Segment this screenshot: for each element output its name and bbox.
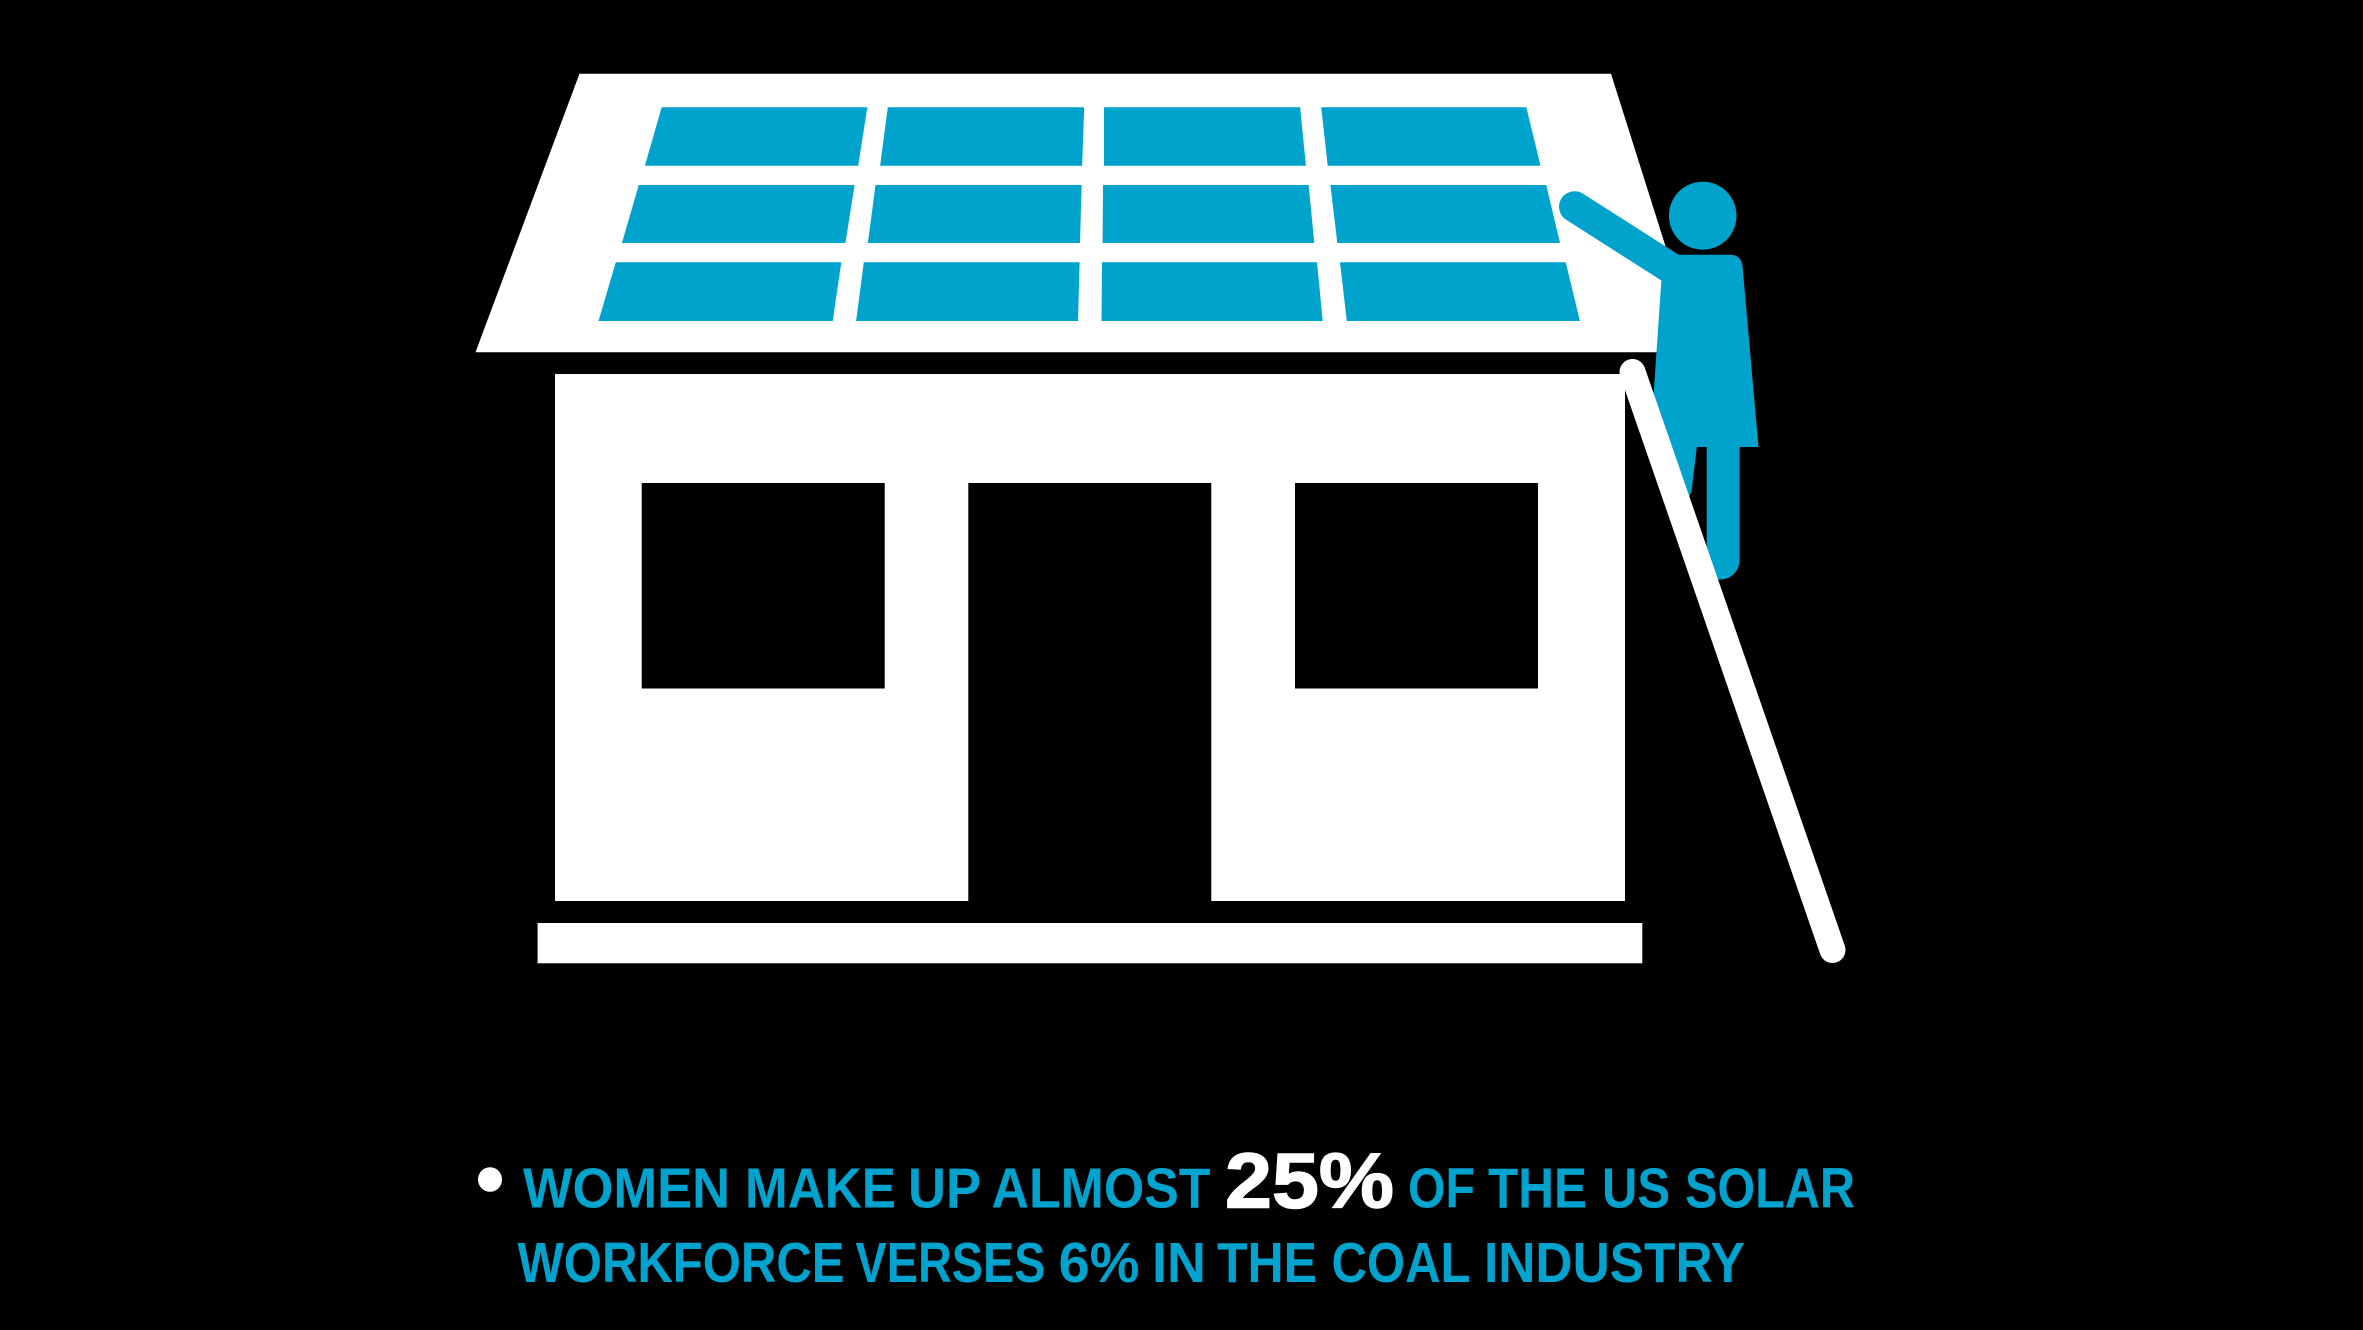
caption line 1: ALMOST — [992, 1157, 1210, 1220]
solar panel row 3 — [598, 262, 1580, 321]
foundation step — [538, 923, 1642, 963]
door — [968, 483, 1211, 901]
house with solar roof — [476, 74, 1699, 963]
caption line 2: COAL — [1332, 1231, 1470, 1294]
right leg — [1707, 445, 1740, 580]
caption line 1: WOMEN — [523, 1157, 730, 1220]
caption line 2: WORKFORCE — [518, 1231, 844, 1294]
caption line 1: UP — [908, 1157, 981, 1220]
head — [1669, 182, 1736, 250]
roof — [476, 74, 1699, 352]
house wall — [555, 374, 1625, 901]
bullet — [478, 1167, 502, 1192]
caption line 2: INDUSTRY — [1484, 1231, 1745, 1294]
caption line 1: MAKE — [745, 1157, 896, 1220]
ladder — [1632, 372, 1832, 950]
caption line 2 — [518, 1231, 1745, 1294]
body and skirt — [1650, 255, 1758, 447]
caption line 2: 6% — [1058, 1231, 1140, 1294]
solar panel row 2 — [622, 185, 1560, 243]
caption line 1 — [523, 1137, 1855, 1225]
caption line 1: OF — [1408, 1157, 1475, 1220]
icon: woman on ladder — [1574, 182, 1758, 580]
right window — [1295, 483, 1538, 688]
caption line 2: THE — [1217, 1231, 1317, 1294]
caption line 1: US — [1602, 1157, 1670, 1220]
solar panels — [598, 107, 1580, 321]
left leg — [1672, 445, 1697, 500]
caption line 1: SOLAR — [1685, 1157, 1855, 1220]
caption line 2: IN — [1152, 1231, 1206, 1294]
caption — [478, 1137, 1855, 1294]
highlighted statistic: 25% — [1225, 1137, 1394, 1225]
arm — [1574, 207, 1680, 274]
left window — [642, 483, 885, 688]
caption line 2: VERSES — [856, 1231, 1046, 1294]
caption line 1: THE — [1488, 1157, 1587, 1220]
solar panel row 1 — [645, 107, 1540, 166]
